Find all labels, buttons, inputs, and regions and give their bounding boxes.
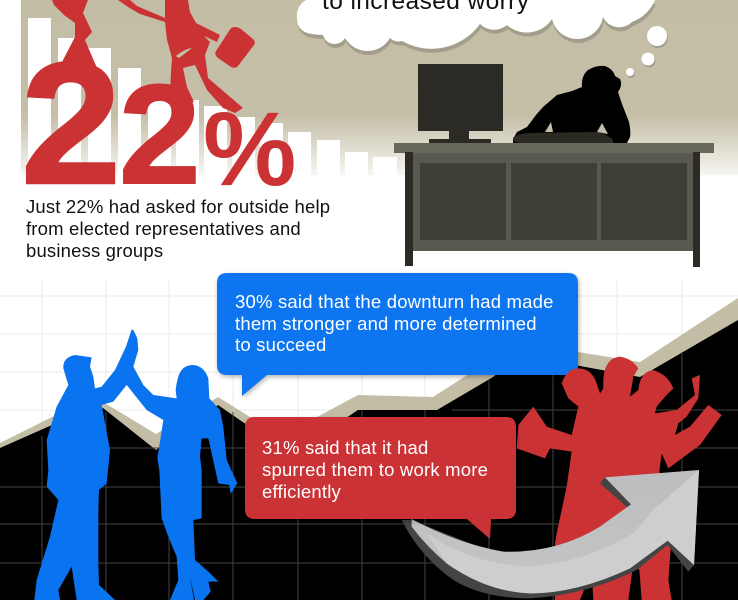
text block: outside help statistic: from elected representatives and xyxy=(26,218,301,239)
text block: outside help statistic: business groups xyxy=(26,240,163,261)
thought cloud with worry text xyxy=(297,0,656,55)
callout: blue 30 percent xyxy=(217,273,578,396)
icon: office desk xyxy=(394,143,714,267)
light grid xyxy=(0,280,738,450)
icon: computer monitor xyxy=(418,64,503,144)
dark grid xyxy=(0,352,738,600)
text block: outside help statistic xyxy=(26,196,330,261)
icon: red group of workers xyxy=(517,357,722,600)
icon: thought bubbles xyxy=(626,26,668,78)
icon: blue figures giving a high five xyxy=(34,329,237,600)
big number: 22%: 2 xyxy=(21,27,121,220)
callout: red 31 percent: spurred them to work more xyxy=(262,459,488,480)
bar chart: falling white bars xyxy=(28,18,397,175)
callout: blue 30 percent: to succeed xyxy=(235,334,326,355)
icon: red business figures climbing the numbers xyxy=(52,0,255,113)
callout: red 31 percent xyxy=(245,417,516,539)
arrow: rising grey arrow xyxy=(402,470,699,598)
callout: red 31 percent: 31% said that it had xyxy=(262,437,428,458)
icon: worried man at desk xyxy=(513,66,630,143)
big number: 22%: % xyxy=(203,91,296,208)
big number: 22%: 2 xyxy=(119,57,201,213)
callout: blue 30 percent: them stronger and more determined xyxy=(235,313,537,334)
text block: outside help statistic: Just 22% had asked for outside help xyxy=(26,196,330,217)
line chart: rising band over black area xyxy=(0,298,738,600)
callout: red 31 percent: efficiently xyxy=(262,481,342,502)
big number: 22% xyxy=(21,27,296,220)
panel: taupe office backdrop xyxy=(21,0,738,175)
callout: blue 30 percent: 30% said that the downturn had made xyxy=(235,291,554,312)
